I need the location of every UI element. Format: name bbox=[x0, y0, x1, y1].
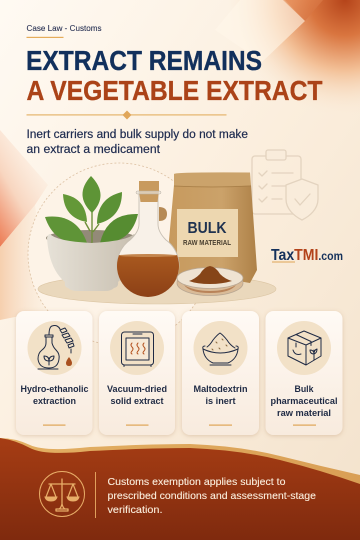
title: EXTRACT REMAINS bbox=[26, 45, 262, 76]
footer icon: scales bbox=[40, 472, 84, 516]
card label: pharmaceutical bbox=[270, 396, 338, 406]
footer text: verification. bbox=[108, 504, 162, 516]
illustration: mortar with plant bbox=[45, 176, 138, 291]
card label: Hydro-ethanolic bbox=[20, 384, 88, 394]
footer text bbox=[108, 476, 316, 516]
plant bbox=[45, 176, 138, 243]
bag label text bbox=[183, 220, 232, 247]
card: vacuum-dried solid extract bbox=[99, 311, 175, 435]
illustration: powder dish bbox=[177, 266, 243, 296]
card label: Bulk bbox=[294, 384, 314, 394]
corner diamonds decoration bbox=[215, 0, 360, 120]
subtitle: Inert carriers and bulk supply do not make bbox=[26, 129, 248, 141]
card label: Maltodextrin bbox=[194, 384, 248, 394]
card label bbox=[20, 384, 88, 406]
title bbox=[26, 45, 323, 106]
title: A VEGETABLE EXTRACT bbox=[26, 75, 323, 106]
footer band bbox=[0, 438, 360, 540]
card label: raw material bbox=[277, 408, 331, 418]
left edge decoration bbox=[0, 130, 50, 320]
card label: solid extract bbox=[110, 396, 164, 406]
icon: extraction flask bbox=[38, 326, 74, 369]
card: maltodextrin is inert bbox=[182, 311, 259, 435]
bag label text: RAW MATERIAL bbox=[183, 240, 232, 247]
card: hydro-ethanolic extraction bbox=[16, 311, 92, 435]
footer text: prescribed conditions and assessment-stage bbox=[108, 490, 316, 502]
subtitle: an extract a medicament bbox=[26, 144, 161, 156]
card label: extraction bbox=[33, 396, 76, 406]
subtitle bbox=[26, 129, 248, 156]
card label bbox=[107, 384, 167, 406]
illustration: flask bbox=[117, 181, 179, 297]
TaxTMI logo: TaxTMI.com bbox=[271, 247, 343, 264]
icon: powder bowl bbox=[203, 333, 238, 365]
platter bbox=[38, 274, 276, 304]
card label: is inert bbox=[206, 396, 236, 406]
card label: Vacuum-dried bbox=[107, 384, 167, 394]
icon: vacuum oven bbox=[122, 332, 154, 366]
dashed circle backdrop bbox=[28, 163, 210, 345]
footer text: Customs exemption applies subject to bbox=[108, 476, 286, 488]
illustration: paper bag bbox=[169, 172, 257, 283]
card label bbox=[194, 384, 248, 406]
title divider bbox=[26, 110, 226, 120]
kicker: Case Law - Customs bbox=[26, 23, 102, 33]
ghost checklist and shield icon bbox=[252, 150, 318, 220]
footer divider bbox=[95, 472, 96, 518]
bag label text: BULK bbox=[188, 220, 227, 237]
card label bbox=[270, 384, 338, 418]
kicker bbox=[26, 23, 102, 38]
icon: box bbox=[288, 331, 321, 365]
card: bulk pharmaceutical raw material bbox=[266, 311, 342, 435]
